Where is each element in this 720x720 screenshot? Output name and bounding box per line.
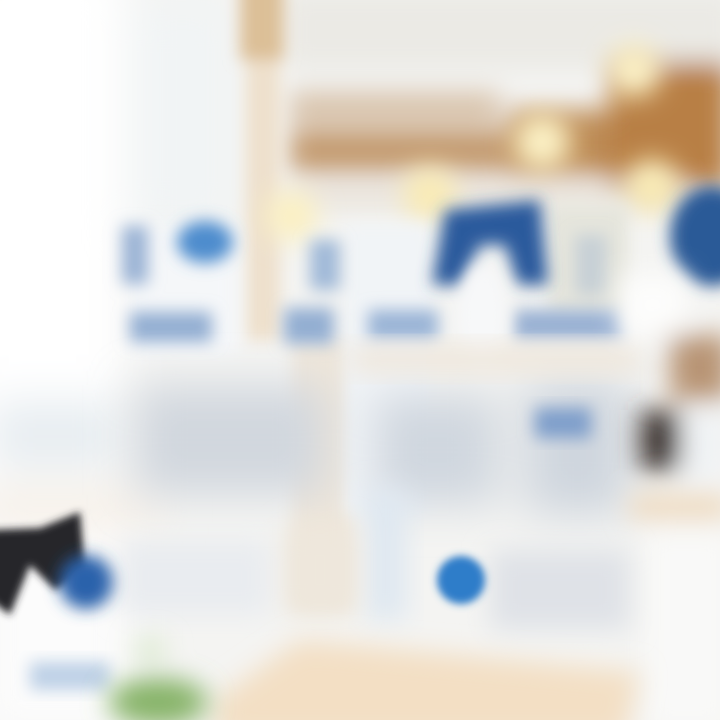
green plant <box>108 638 208 720</box>
beige band <box>350 345 640 373</box>
pale blue centre column <box>365 490 407 620</box>
blue header shapes <box>122 221 622 344</box>
navy arch <box>432 200 548 285</box>
dark objects bottom left <box>0 512 85 615</box>
blue block detail <box>535 408 591 438</box>
wooden table <box>215 640 640 720</box>
wooden pillar <box>240 0 352 610</box>
panel: left board <box>130 225 238 355</box>
blue label bottom left <box>30 662 110 690</box>
white form below arch <box>458 263 506 367</box>
icon: blue circle left <box>59 555 113 609</box>
dark blue sphere on right <box>670 186 720 286</box>
grey content blocks <box>135 380 630 515</box>
right side furniture <box>620 275 720 720</box>
panel: centre board <box>345 225 430 515</box>
icon: blue circle centre <box>437 556 485 604</box>
bright window on left <box>0 0 235 720</box>
panel: right board <box>548 205 628 315</box>
display panels <box>130 205 628 515</box>
wooden ceiling <box>285 0 720 207</box>
lower panels <box>120 525 630 630</box>
glowing ceiling lights <box>266 43 679 242</box>
